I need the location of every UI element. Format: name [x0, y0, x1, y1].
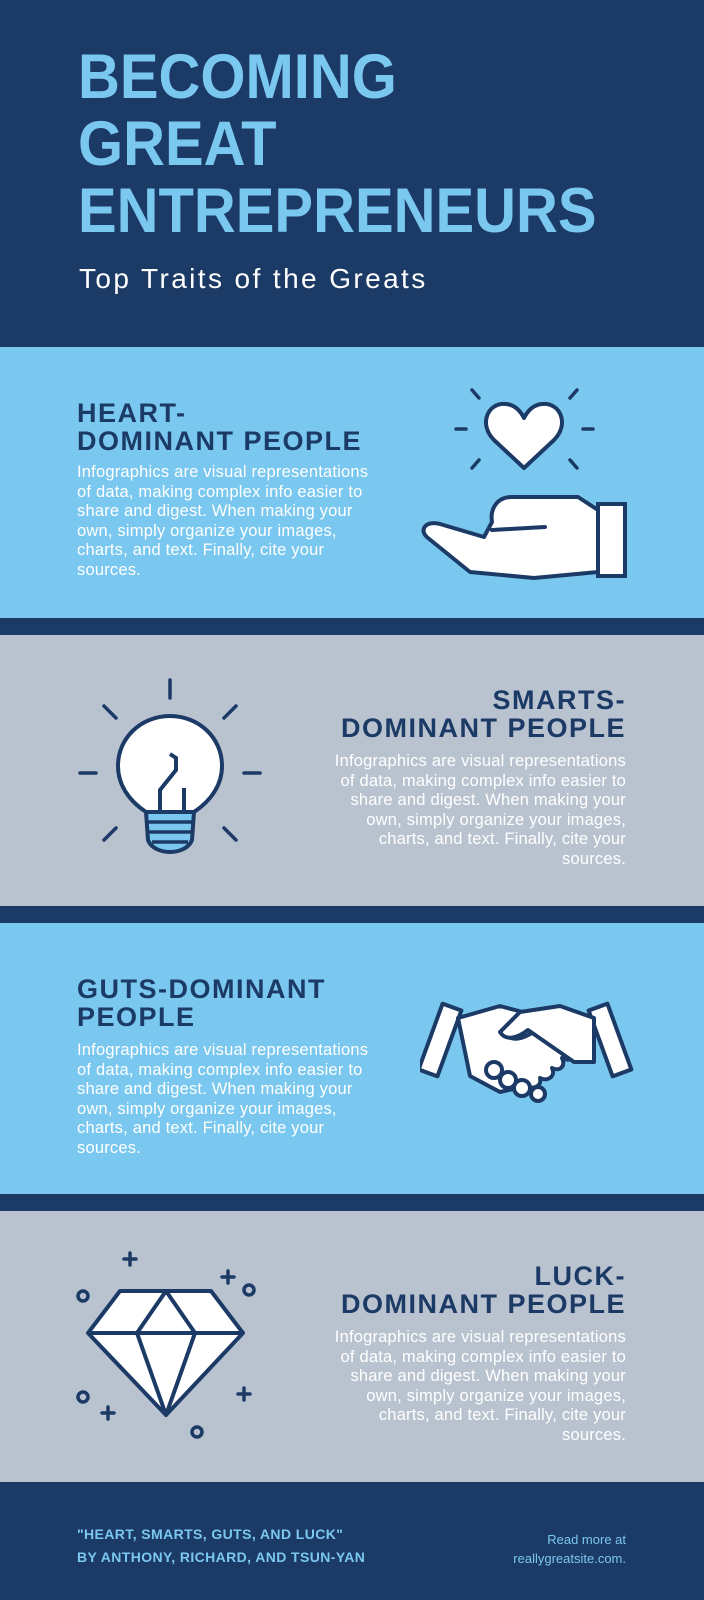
title: [78, 42, 597, 246]
heading: luck: DOMINANT PEOPLE: [341, 1289, 626, 1319]
icon: heart in hand: [422, 388, 627, 580]
heading: smarts: SMARTS-: [492, 685, 626, 715]
heading: guts: PEOPLE: [77, 1002, 196, 1032]
icon: diamond: [76, 1251, 256, 1439]
text: guts: Infographics are visual representations of data, making complex info easier to share and digest. When making your own, simply organize your images, charts, and text. Finally, cite your sources.: [77, 1041, 368, 1156]
footer: citation: [77, 1526, 365, 1565]
panel: guts: [0, 923, 704, 1194]
heading: luck: LUCK-: [535, 1261, 626, 1291]
heading: heart: [77, 398, 362, 456]
text: smarts: Infographics are visual representations of data, making complex info easier to share and digest. When making your own, simply organize your images, charts, and text. Finally, cite your sources.: [335, 752, 626, 868]
text: heart: Infographics are visual representations of data, making complex info easier to share and digest. When making your own, simply organize your images, charts, and text. Finally, cite your sources.: [77, 463, 368, 578]
heading: luck: [341, 1261, 626, 1319]
heading: guts: [77, 974, 326, 1032]
subtitle: Top Traits of the Greats: [79, 263, 428, 294]
title: BECOMING: [78, 42, 397, 112]
footer: link: reallygreatsite.com.: [513, 1551, 626, 1566]
icon: handshake: [420, 1002, 634, 1103]
heading: guts: GUTS-DOMINANT: [77, 974, 326, 1004]
panel: luck: [0, 1211, 704, 1482]
panel: heart: [0, 347, 704, 618]
footer: link: Read more at: [547, 1532, 626, 1547]
footer: citation: "HEART, SMARTS, GUTS, AND LUCK": [77, 1526, 343, 1542]
heading: heart: DOMINANT PEOPLE: [77, 426, 362, 456]
title: GREAT: [78, 109, 277, 179]
heading: heart: HEART-: [77, 398, 186, 428]
header: [0, 0, 704, 347]
footer: [0, 1482, 704, 1600]
text: luck: Infographics are visual representations of data, making complex info easier to share and digest. When making your own, simply organize your images, charts, and text. Finally, cite your sources.: [335, 1328, 626, 1444]
footer: link: [513, 1532, 626, 1566]
heading: smarts: [341, 685, 626, 743]
footer: citation: BY ANTHONY, RICHARD, AND TSUN-YAN: [77, 1549, 365, 1565]
heading: smarts: DOMINANT PEOPLE: [341, 713, 626, 743]
icon: light bulb: [78, 678, 262, 854]
title: ENTREPRENEURS: [78, 176, 597, 246]
panel: smarts: [0, 635, 704, 906]
